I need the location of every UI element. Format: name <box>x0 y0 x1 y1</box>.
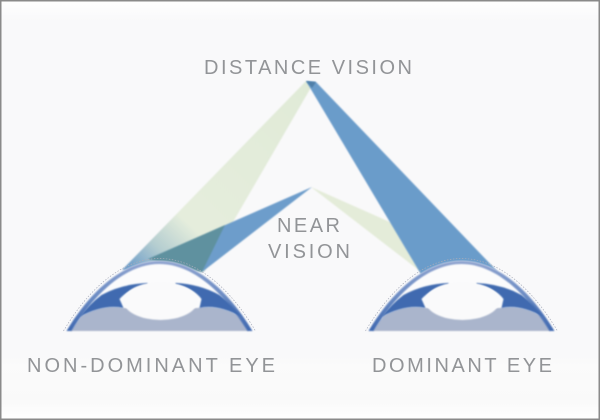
eye outer dashed outline <box>64 258 256 331</box>
eye dome <box>368 261 554 331</box>
label: near vision: VISION <box>268 241 350 263</box>
beam tip <box>306 81 316 88</box>
left iris wing <box>382 283 448 317</box>
eye base fill <box>372 307 550 331</box>
light beam: near to non-dominant eye <box>148 187 312 272</box>
light beam: near to dominant eye <box>311 187 421 272</box>
label: dominant eye: DOMINANT EYE <box>372 355 552 377</box>
label: near vision: NEAR <box>277 215 340 237</box>
left iris wing <box>80 283 148 317</box>
heading: distance vision: DISTANCE VISION <box>204 57 412 79</box>
cornea arc <box>66 261 252 331</box>
label: non-dominant eye: NON-DOMINANT EYE <box>27 355 275 377</box>
eye dome <box>66 261 252 331</box>
right iris wing <box>476 283 544 317</box>
cornea arc <box>368 261 554 331</box>
beam overlap <box>148 225 225 272</box>
lens <box>124 282 198 320</box>
eye outer dashed outline <box>366 258 558 331</box>
eye: dominant <box>366 258 558 331</box>
lens <box>426 282 500 320</box>
label: near vision <box>268 215 350 263</box>
eye: non-dominant <box>64 258 256 331</box>
light beam: distance to non-dominant eye <box>122 81 313 272</box>
eye base fill <box>70 307 248 331</box>
light beam: distance to dominant eye <box>306 81 498 276</box>
right iris wing <box>176 283 242 317</box>
